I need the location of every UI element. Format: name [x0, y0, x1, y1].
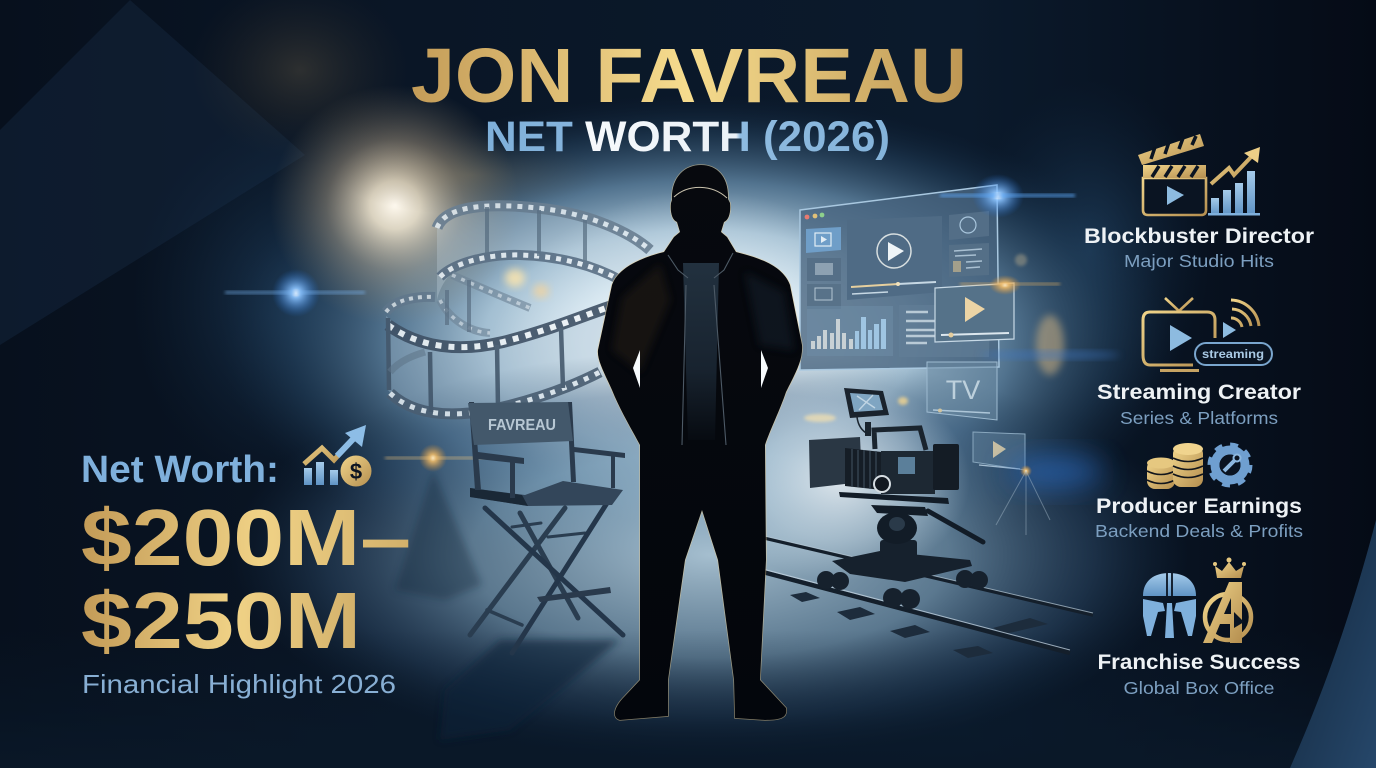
jacket zip lines: [668, 253, 733, 445]
camera body: [809, 417, 959, 494]
director's chair: [440, 402, 625, 740]
t-shirt: [683, 263, 719, 440]
feature: producer earnings: [1095, 443, 1303, 541]
heading: Streaming Creator: [1097, 381, 1301, 404]
sidebar thumbnails: [806, 227, 841, 309]
subtitle: Backend Deals & Profits: [1095, 521, 1303, 541]
icon: growth chart with coin: $: [350, 459, 362, 484]
net worth label: Net Worth:: [81, 449, 279, 491]
camera rails: [730, 528, 1093, 658]
icon: growth chart with coin: [304, 425, 372, 486]
chair name: FAVREAU: [488, 417, 556, 434]
chair seat, posts and arms: [469, 402, 625, 602]
net worth panel: [81, 425, 411, 699]
cap brim line: [674, 187, 727, 198]
heading: Blockbuster Director: [1084, 225, 1314, 248]
figure rim light: [598, 165, 802, 720]
lens flares left: [225, 269, 549, 600]
floating small play card: [973, 432, 1025, 470]
subtitle: Global Box Office: [1124, 678, 1274, 698]
icon: clapperboard and growth chart: [1138, 134, 1260, 216]
heading: Producer Earnings: [1096, 495, 1302, 518]
net worth caption: Financial Highlight 2026: [82, 669, 396, 699]
chair legs and frame: [470, 503, 623, 653]
feature: franchise success: [1098, 558, 1300, 698]
dolly: [817, 540, 988, 609]
camera monitor: [844, 388, 889, 418]
text list panel: [899, 305, 990, 357]
title line 1: JON FAVREAU: [411, 33, 967, 119]
floating video card: [935, 283, 1014, 342]
feature: blockbuster director: [1084, 134, 1314, 271]
dashboard window: [800, 185, 999, 370]
title line 2: NET WORTH (2026): [485, 113, 890, 161]
pocket light gaps: [633, 350, 640, 388]
bar chart panel: [807, 306, 893, 356]
cinema camera on dolly: [809, 388, 988, 609]
subtitle: Major Studio Hits: [1124, 251, 1274, 271]
icon: TV and streaming badge: [1143, 298, 1272, 372]
jacket shading: [612, 264, 794, 372]
feature: streaming creator: [1097, 298, 1301, 428]
film reel: [386, 206, 650, 414]
floating TV card: [927, 362, 997, 420]
net worth amount line 1: $200M–: [81, 493, 411, 582]
title: [411, 33, 967, 161]
chair back canvas: [468, 402, 573, 445]
icon: helmet and emblem with crown: [1143, 558, 1251, 643]
tripod head: [839, 492, 983, 544]
silhouette figure: [598, 165, 802, 720]
net worth amount line 2: $250M: [81, 576, 361, 665]
lens flares right: [804, 174, 1120, 535]
heading: Franchise Success: [1098, 651, 1300, 674]
streaming dashboard: [800, 185, 1025, 470]
right thumbnails: [949, 211, 989, 277]
icon: coins and gear: [1147, 443, 1250, 489]
chair floor shadow: [440, 640, 620, 740]
icon: TV and streaming badge: streaming: [1202, 347, 1264, 361]
subtitle: Series & Platforms: [1120, 408, 1278, 428]
floating TV card: TV: [946, 375, 980, 405]
main video player: [847, 216, 942, 300]
